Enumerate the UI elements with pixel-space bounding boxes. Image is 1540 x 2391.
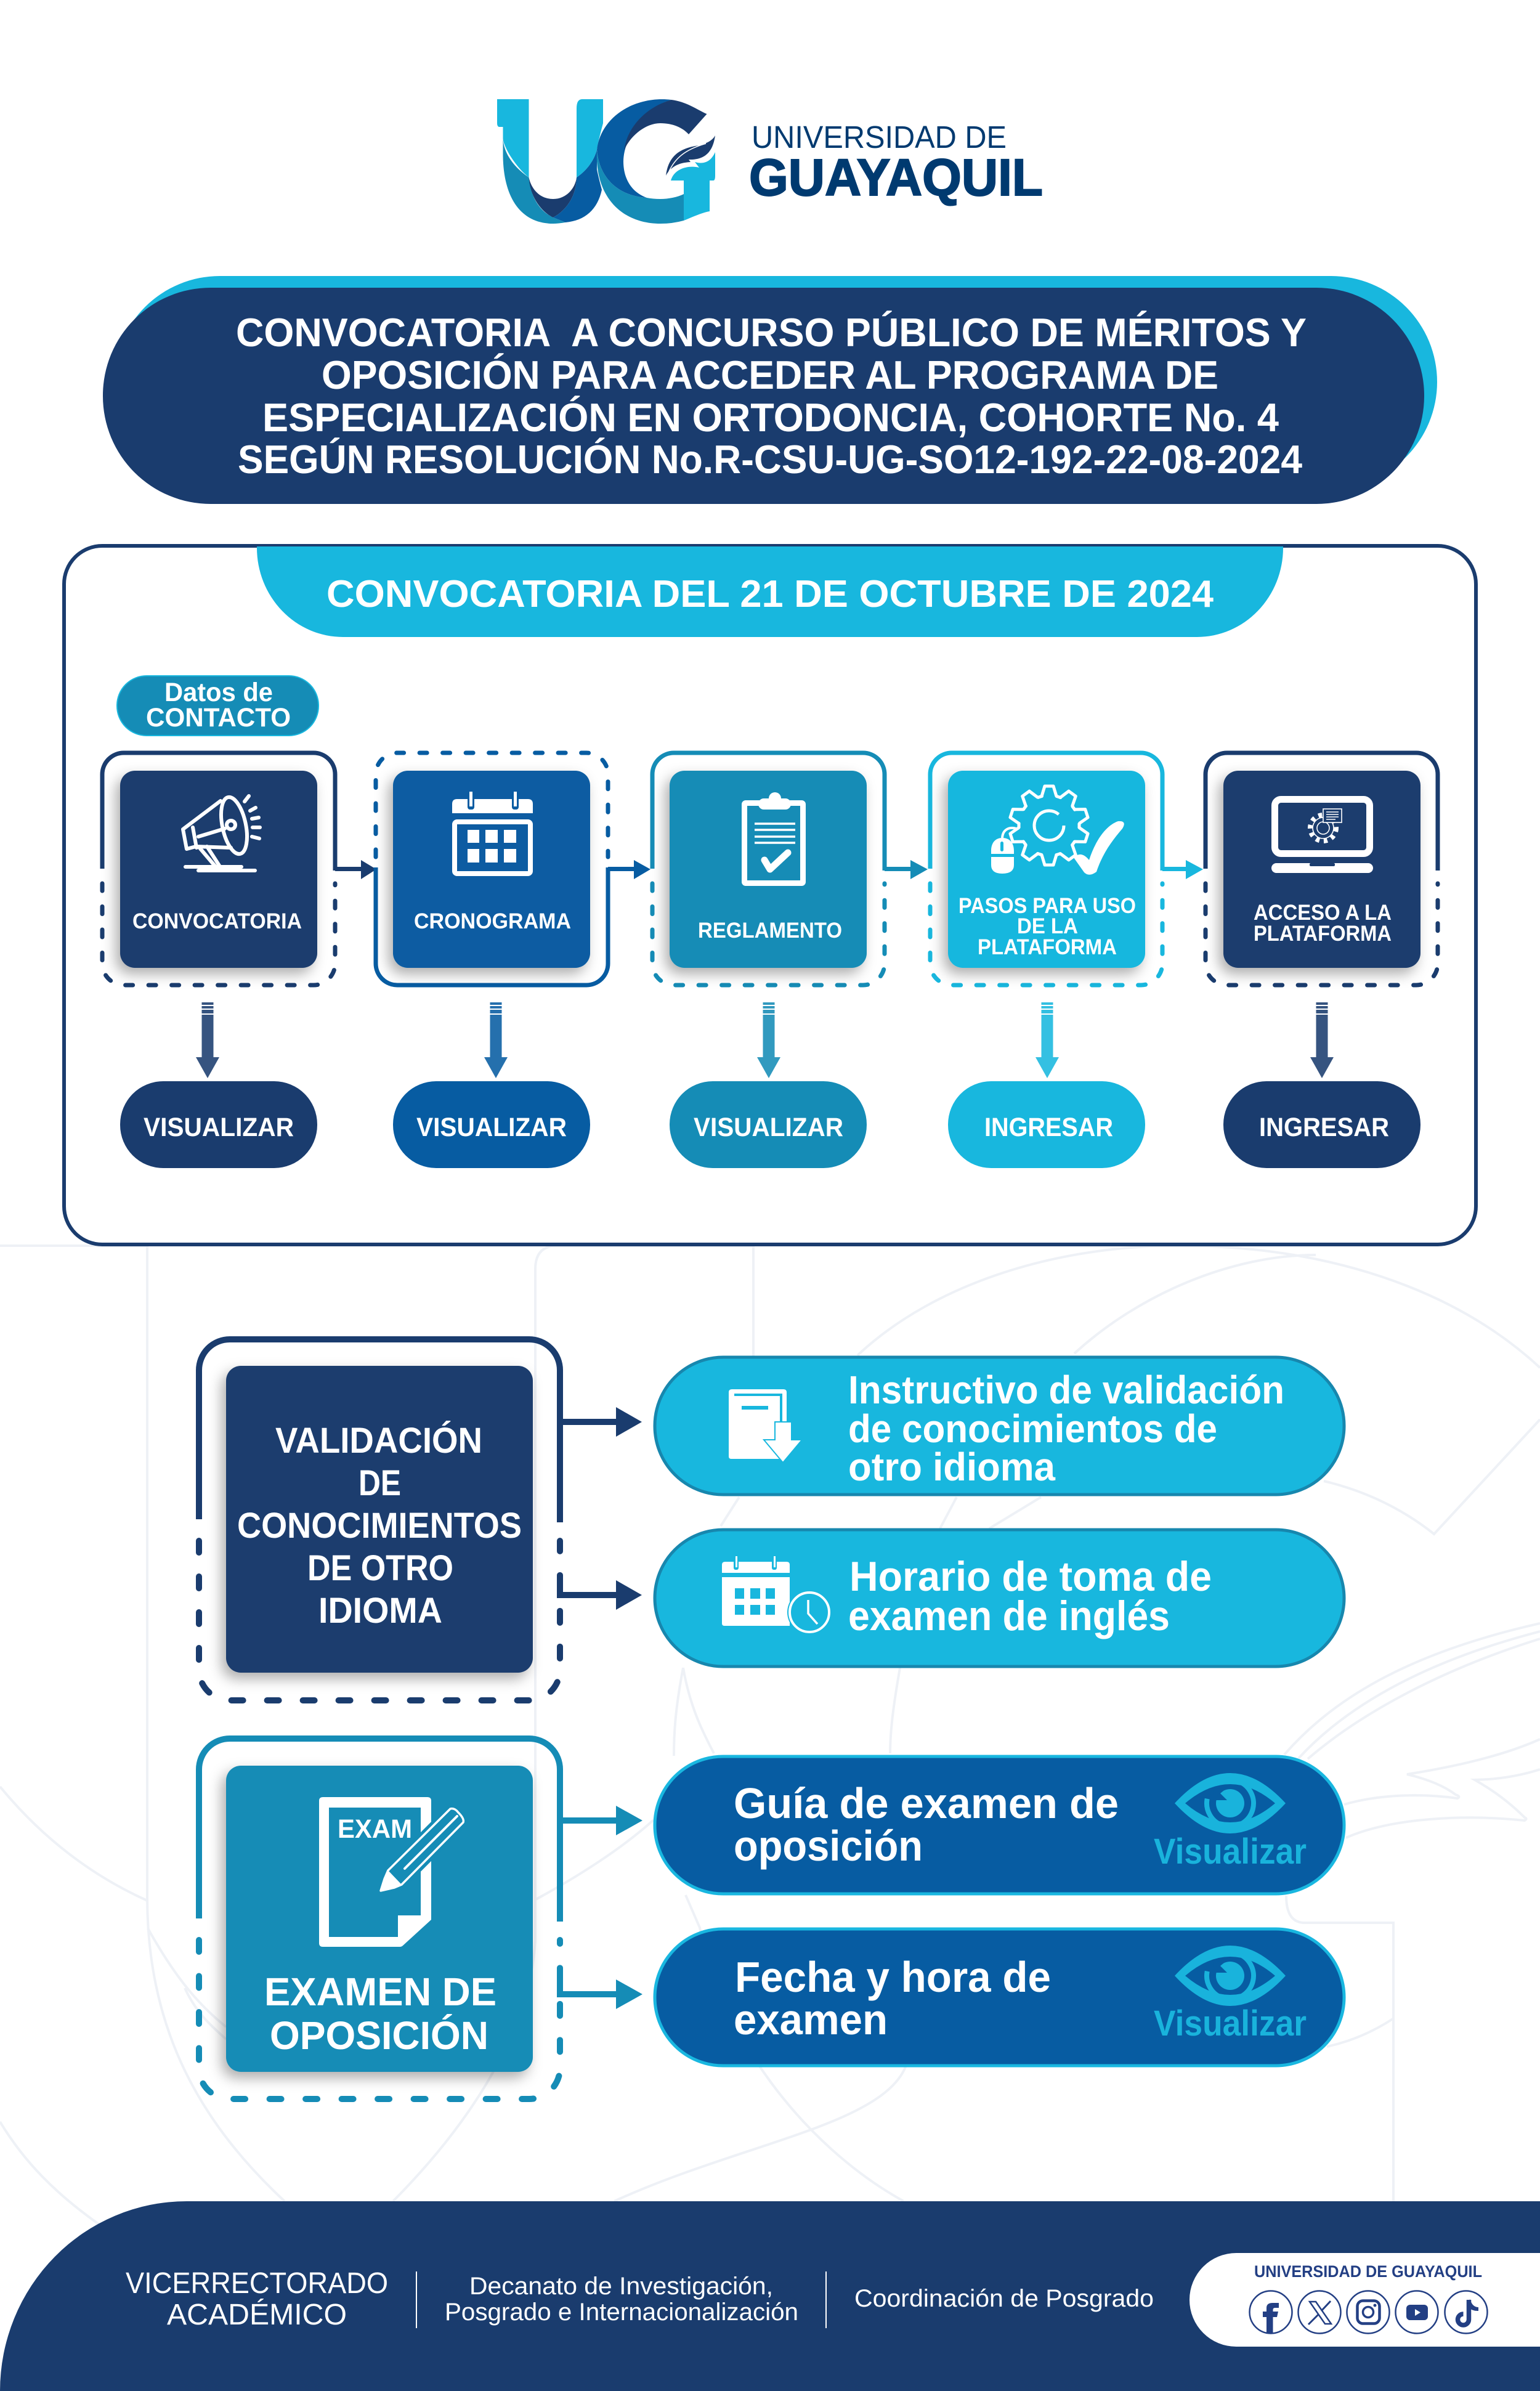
pill text: [848, 1368, 1284, 1489]
step: acceso a la plataforma: ACCESO A LA: [1254, 901, 1392, 925]
label: pasos: [958, 894, 1136, 959]
icon: x: [1299, 2291, 1340, 2334]
title text: SEGÚN RESOLUCIÓN No.R-CSU-UG-SO12-192-22-08-2024: [238, 437, 1302, 482]
step: convocatoria: [102, 753, 335, 985]
card text: [237, 1421, 522, 1631]
pill: guía de examen: [655, 1756, 1344, 1894]
arrow: pasos to acceso: [1162, 860, 1203, 879]
button: ingresar plataforma: INGRESAR: [1259, 1113, 1389, 1142]
label: pasos: PLATAFORMA: [978, 935, 1117, 959]
arrow: examen to fecha: [557, 1977, 642, 2009]
step: acceso a la plataforma: [1206, 753, 1438, 985]
footer: vicerrectorado: ACADÉMICO: [167, 2299, 347, 2331]
label: pasos: DE LA: [1017, 914, 1078, 938]
card text: VALIDACIÓN: [275, 1421, 482, 1461]
pill text: [848, 1553, 1212, 1639]
card text: CONOCIMIENTOS: [237, 1506, 522, 1546]
arrow: down 2: [484, 1002, 508, 1078]
pill text: [734, 1953, 1051, 2044]
footer: [0, 2201, 1540, 2391]
pill text: de conocimientos de: [848, 1407, 1217, 1451]
panel: validación de conocimientos: [199, 1339, 560, 1700]
icon: eye: [1175, 1771, 1286, 1835]
footer: decanato: Posgrado e Internacionalización: [445, 2299, 798, 2326]
arrow: down 4: [1035, 1002, 1059, 1078]
button: visualizar cronograma: [393, 1081, 590, 1168]
button: visualizar convocatoria: VISUALIZAR: [144, 1113, 294, 1142]
icon: eye: [1175, 1944, 1286, 2008]
footer: vicerrectorado: [126, 2267, 388, 2331]
icon: tiktok: [1445, 2291, 1487, 2334]
icon: laptop: [1271, 800, 1373, 873]
arrow: down 1: [196, 1002, 219, 1078]
icon: megaphone: [183, 795, 260, 871]
icon: instagram: [1347, 2291, 1390, 2334]
button: ingresar pasos: INGRESAR: [984, 1113, 1113, 1142]
card text: DE: [359, 1463, 401, 1503]
pill text: examen de inglés: [848, 1593, 1170, 1639]
pill: horario: [655, 1530, 1344, 1666]
footer: vicerrectorado: VICERRECTORADO: [126, 2267, 388, 2300]
footer: decanato: [445, 2273, 798, 2326]
pill: guía de examen: Visualizar: [1154, 1832, 1307, 1872]
title text: CONVOCATORIA A CONCURSO PÚBLICO DE MÉRITOS Y: [236, 310, 1307, 355]
footer: social media block: [1189, 2253, 1540, 2347]
card text: IDIOMA: [318, 1591, 442, 1631]
icon: clipboard: [744, 792, 803, 883]
logo: Universidad de Guayaquil: [497, 99, 1043, 224]
card text: OPOSICIÓN: [270, 2013, 488, 2058]
button: visualizar reglamento: VISUALIZAR: [694, 1113, 843, 1142]
button: datos de contacto: CONTACTO: [146, 703, 291, 733]
button: datos de contacto: Datos de: [164, 678, 273, 707]
pill text: Horario de toma de: [849, 1553, 1212, 1600]
panel: convocatoria: [64, 546, 1476, 1244]
icon: calendar and clock: [722, 1556, 832, 1634]
step: cronograma: [376, 753, 608, 985]
icon: UG monogram: [497, 99, 715, 224]
step: convocatoria: CONVOCATORIA: [132, 909, 302, 933]
step: cronograma: CRONOGRAMA: [414, 909, 571, 933]
arrow: cronograma to reglamento: [608, 860, 650, 879]
step: reglamento: REGLAMENTO: [698, 919, 842, 943]
card text: [264, 1970, 496, 2058]
arrow: examen to guía: [560, 1806, 642, 1835]
footer: decanato: Decanato de Investigación,: [469, 2273, 773, 2300]
icon: document download: [729, 1389, 802, 1463]
pill text: Guía de examen de: [734, 1779, 1119, 1827]
heading: convocatoria date: CONVOCATORIA DEL 21 DE OCTUBRE DE 2024: [326, 573, 1214, 615]
footer: social media block: UNIVERSIDAD DE GUAYAQUIL: [1254, 2262, 1482, 2281]
pill: fecha y hora: [655, 1929, 1344, 2066]
card text: EXAMEN DE: [264, 1970, 496, 2014]
icon: exam sheet and pencil: [319, 1797, 464, 1947]
icon: exam sheet and pencil: EXAM: [338, 1814, 412, 1844]
title text: ESPECIALIZACIÓN EN ORTODONCIA, COHORTE No. 4: [262, 395, 1279, 440]
icon: youtube: [1396, 2291, 1438, 2334]
heading: convocatoria date: [257, 546, 1283, 637]
logo wordmark: [749, 120, 1043, 206]
button: visualizar cronograma: VISUALIZAR: [416, 1113, 567, 1142]
card text: DE OTRO: [307, 1548, 453, 1588]
button: ingresar plataforma: [1223, 1081, 1420, 1168]
title banner: [103, 276, 1437, 504]
button: visualizar reglamento: [670, 1081, 867, 1168]
step: acceso a la plataforma: PLATAFORMA: [1254, 922, 1392, 946]
pill text: Instructivo de validación: [848, 1368, 1284, 1412]
pill: fecha y hora: Visualizar: [1154, 2003, 1307, 2044]
pill: instructivo: [655, 1357, 1344, 1495]
arrow: reglamento to pasos: [885, 860, 928, 879]
arrow: down 3: [757, 1002, 780, 1078]
pill text: examen: [734, 1995, 888, 2044]
label: pasos: PASOS PARA USO: [958, 894, 1136, 918]
icon: calendar: [452, 792, 533, 874]
button: visualizar convocatoria: [120, 1081, 317, 1168]
step: reglamento: [652, 753, 885, 985]
step: pasos para uso de la plataforma: [930, 753, 1162, 985]
logo wordmark: UNIVERSIDAD DE: [752, 120, 1007, 155]
title text: [236, 310, 1307, 482]
pill text: oposición: [734, 1822, 923, 1870]
icon: facebook: [1249, 2291, 1292, 2334]
pill text: otro idioma: [848, 1445, 1055, 1489]
title text: OPOSICIÓN PARA ACCEDER AL PROGRAMA DE: [322, 352, 1218, 397]
logo wordmark: GUAYAQUIL: [749, 148, 1043, 206]
arrow: validación to instructivo: [560, 1407, 642, 1437]
panel: examen de oposición: [199, 1739, 560, 2099]
arrow: down 5: [1310, 1002, 1334, 1078]
arrow: convocatoria to cronograma: [335, 860, 376, 879]
button: ingresar pasos: [948, 1081, 1145, 1168]
pill text: [734, 1779, 1119, 1870]
icon: gear, mouse and check: [991, 786, 1124, 875]
arrow: validación to horario: [557, 1578, 642, 1610]
button: datos de contacto: [117, 676, 318, 736]
pill text: Fecha y hora de: [735, 1953, 1051, 2001]
footer: coordinación: Coordinación de Posgrado: [854, 2285, 1154, 2312]
